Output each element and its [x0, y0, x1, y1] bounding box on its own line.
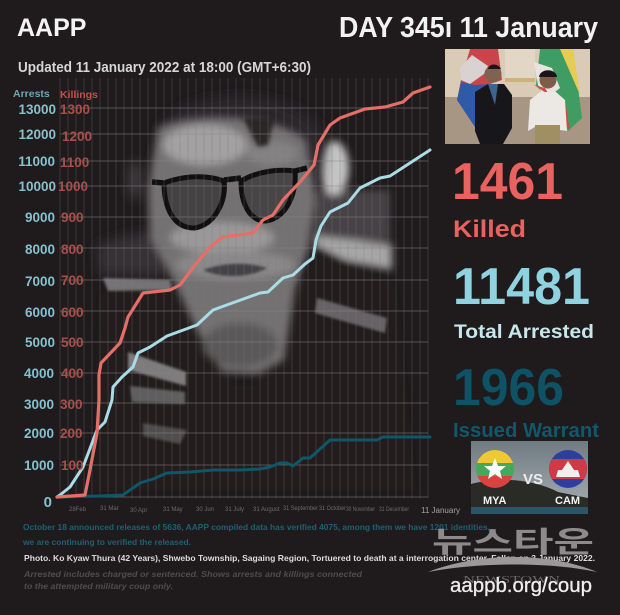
watermark: newstown: 뉴스타운: [432, 526, 594, 559]
axis: killings values: 1300: [60, 102, 90, 117]
axis: month labels: 30 November: [346, 507, 375, 513]
photo: backdrop patches: [312, 141, 392, 270]
note: releases: [22, 522, 490, 547]
stat: total arrested: [453, 258, 594, 343]
axis: arrests values: 4000: [24, 366, 54, 381]
axis: killings values: 300: [60, 397, 83, 412]
axis: arrests values: 7000: [25, 274, 55, 289]
axis: arrests values: 11000: [18, 154, 55, 169]
axis: month labels: 31 July: [225, 507, 244, 513]
axis: arrests values: 10000: [18, 179, 56, 194]
photo: left glow: [97, 160, 170, 275]
note: definitions: to the attempted military coup only.: [24, 581, 173, 591]
axis: month labels: 31 September: [283, 506, 318, 512]
photo: hair: [150, 96, 325, 190]
axis: killings values: 800: [61, 242, 84, 257]
note: definitions: [23, 569, 363, 591]
photo: jacket: [95, 255, 415, 490]
stat: total arrested: 11481: [453, 258, 590, 316]
label: MYA: MYA: [483, 495, 506, 507]
Cambodia flag: [457, 49, 502, 127]
axis: arrests values: 6000: [25, 305, 55, 320]
flag: Myanmar: [476, 450, 514, 489]
photo: Cambodia and Myanmar leaders: [445, 49, 590, 144]
axis: killings values: 200: [60, 426, 83, 441]
axis: arrests values: 5000: [25, 335, 55, 350]
axis: killings values: [58, 102, 92, 473]
Myanmar flag: [536, 49, 582, 131]
axis: arrests values: 13000: [18, 102, 56, 117]
watermark: newstown: [428, 526, 597, 586]
photo: hair tuft: [243, 116, 275, 147]
axis: arrests values: 1000: [24, 458, 54, 473]
axis: month labels: [69, 506, 409, 514]
stat: killed: [452, 153, 563, 243]
photo: jacket badges: [103, 278, 387, 444]
legend: axis titles: [13, 88, 98, 101]
axis: arrests values: 2000: [24, 426, 54, 441]
stat: issued warrant: [453, 359, 599, 442]
axis: killings values: 500: [61, 335, 84, 350]
note: releases: we are continuing to verified the released.: [22, 537, 191, 547]
label: VS: VS: [523, 471, 543, 488]
axis: month labels: 31 May: [163, 507, 183, 513]
legend: axis titles: Killings: [60, 89, 98, 101]
axis: month labels: 31 October: [319, 506, 346, 512]
stat: total arrested: Total Arrested: [454, 322, 594, 343]
portrait photo: [95, 96, 415, 490]
axis: month labels: 31 December: [379, 507, 409, 513]
note: releases: October 18 announced releases of 5636, AAPP compiled data has verified 4075, among them we have 1201 identities,: [23, 522, 490, 532]
axis: month labels: 28Feb: [69, 507, 87, 513]
leader in white shirt: [528, 92, 567, 131]
axis: killings values: 1100: [60, 155, 89, 170]
note: definitions: Arrested includes charged or sentenced. Shows arrests and killings connected: [23, 569, 363, 579]
axis: killings values: 900: [61, 210, 84, 225]
legend: axis titles: Arrests: [13, 88, 50, 100]
axis: arrests values: [18, 102, 56, 511]
leader in dark suit: [475, 84, 512, 144]
note: photo caption: Photo. Ko Kyaw Thura (42 Years), Shwebo Township, Sagaing Region, Tortuered to death at a interrogation center, Fallen on 3 January 2022.: [24, 553, 595, 563]
axis: arrests values: 9000: [25, 210, 55, 225]
photo: face: [148, 117, 316, 374]
stat: issued warrant: Issued Warrant: [453, 420, 599, 442]
line: arrests: [57, 150, 430, 497]
axis: month labels: 31 Mar: [100, 506, 119, 512]
axis: month labels: 31 August: [253, 507, 280, 513]
match graphic: MYA vs CAM: [471, 441, 588, 514]
title: day counter: DAY 345ı 11 January: [339, 12, 598, 44]
line: killings: [57, 87, 430, 497]
axis: killings values: 600: [61, 305, 84, 320]
axis: arrests values: 0: [44, 494, 52, 511]
source url: aappb.org/coup: [450, 575, 592, 597]
line: issued warrants: [57, 437, 430, 497]
photo: sunglasses: [152, 168, 307, 228]
stat: killed: Killed: [453, 216, 526, 243]
axis: killings values: 1000: [58, 179, 88, 194]
axis: month labels: 30 Jun: [196, 507, 214, 513]
chart grid: [60, 78, 428, 498]
label: CAM: CAM: [555, 495, 580, 507]
axis: arrests values: 3000: [24, 397, 54, 412]
stat: killed: 1461: [452, 153, 563, 211]
title: AAPP: AAPP: [17, 14, 86, 42]
axis: killings values: 100: [61, 458, 84, 473]
axis: killings values: 1200: [62, 129, 92, 144]
axis: arrests values: 12000: [18, 127, 56, 142]
watermark: newstown: NEWSTOWN: [463, 575, 560, 586]
photo: lips: [203, 264, 267, 276]
axis: end date: 11 January: [421, 506, 460, 515]
subtitle: updated time: Updated 11 January 2022 at 18:00 (GMT+6:30): [18, 60, 311, 76]
axis: month labels: 30 Apr: [130, 508, 147, 514]
axis: killings values: 400: [61, 366, 84, 381]
stat: issued warrant: 1966: [453, 359, 564, 417]
axis: arrests values: 8000: [25, 242, 55, 257]
axis: killings values: 700: [61, 273, 84, 288]
flag: Cambodia: [549, 450, 587, 488]
